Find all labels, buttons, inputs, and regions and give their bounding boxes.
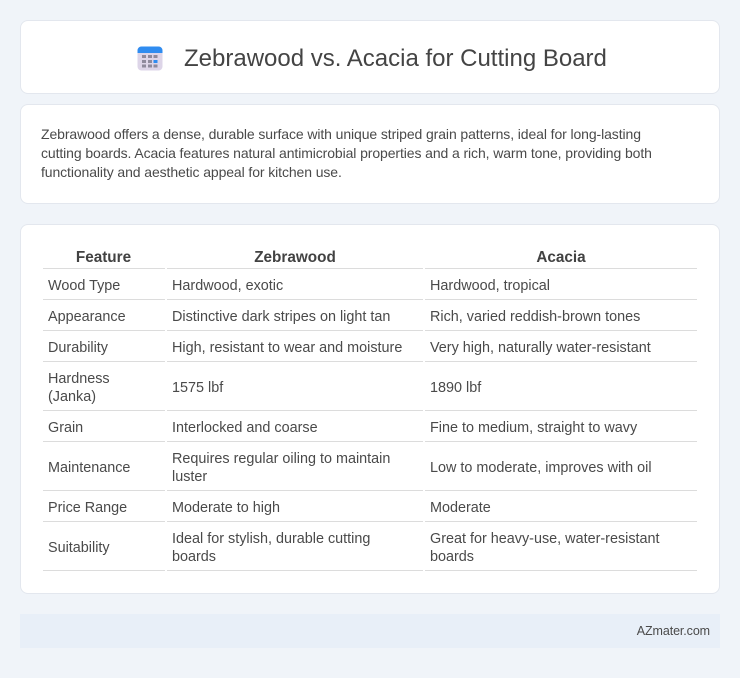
header: Zebrawood: Zebrawood	[254, 249, 336, 266]
footer text: AZmater.com	[637, 624, 710, 638]
row: Hardness: Hardness	[48, 371, 110, 387]
intro text: cutting boards. Acacia features natural antimicrobial properties and a rich, warm tone, providing both	[41, 145, 652, 161]
title card	[20, 20, 720, 94]
table: Moderate	[430, 500, 491, 516]
row: Suitability: Suitability	[48, 540, 110, 556]
table: 1575 lbf	[172, 380, 223, 396]
table: Ideal for stylish, durable cutting	[172, 531, 370, 547]
table: Very high, naturally water-resistant	[430, 340, 651, 356]
table: Rich, varied reddish-brown tones	[430, 309, 640, 325]
icon: calendar	[138, 46, 162, 70]
table: Fine to medium, straight to wavy	[430, 420, 637, 436]
title: Zebrawood vs. Acacia for Cutting Board	[184, 45, 607, 72]
row: Durability: Durability	[48, 340, 108, 356]
table: Interlocked and coarse	[172, 420, 318, 436]
intro card	[20, 104, 720, 204]
footer bar	[20, 614, 720, 648]
row: Hardness	[48, 371, 110, 405]
table: Moderate to high	[172, 500, 280, 516]
table: boards	[172, 549, 216, 565]
intro text: Zebrawood offers a dense, durable surface with unique striped grain patterns, ideal for long-lasting	[41, 126, 641, 142]
table: Hardwood, exotic	[172, 278, 283, 294]
intro text	[41, 126, 652, 180]
row: Wood Type: Wood Type	[48, 278, 120, 294]
row: Price Range: Price Range	[48, 500, 127, 516]
header: Acacia: Acacia	[536, 249, 586, 266]
row: Maintenance: Maintenance	[48, 460, 130, 476]
table: High, resistant to wear and moisture	[172, 340, 402, 356]
table: Great for heavy-use, water-resistant	[430, 531, 660, 547]
table: Requires regular oiling to maintain	[172, 451, 390, 467]
table: Low to moderate, improves with oil	[430, 460, 652, 476]
row: Hardness: (Janka)	[48, 389, 96, 405]
row: Appearance: Appearance	[48, 309, 126, 325]
header: Feature: Feature	[76, 249, 131, 266]
table card	[20, 224, 720, 594]
row: Grain: Grain	[48, 420, 83, 436]
table: Hardwood, tropical	[430, 278, 550, 294]
intro text: functionality and aesthetic appeal for kitchen use.	[41, 164, 342, 180]
table: 1890 lbf	[430, 380, 481, 396]
table: Distinctive dark stripes on light tan	[172, 309, 390, 325]
table: luster	[172, 469, 207, 485]
table: boards	[430, 549, 474, 565]
